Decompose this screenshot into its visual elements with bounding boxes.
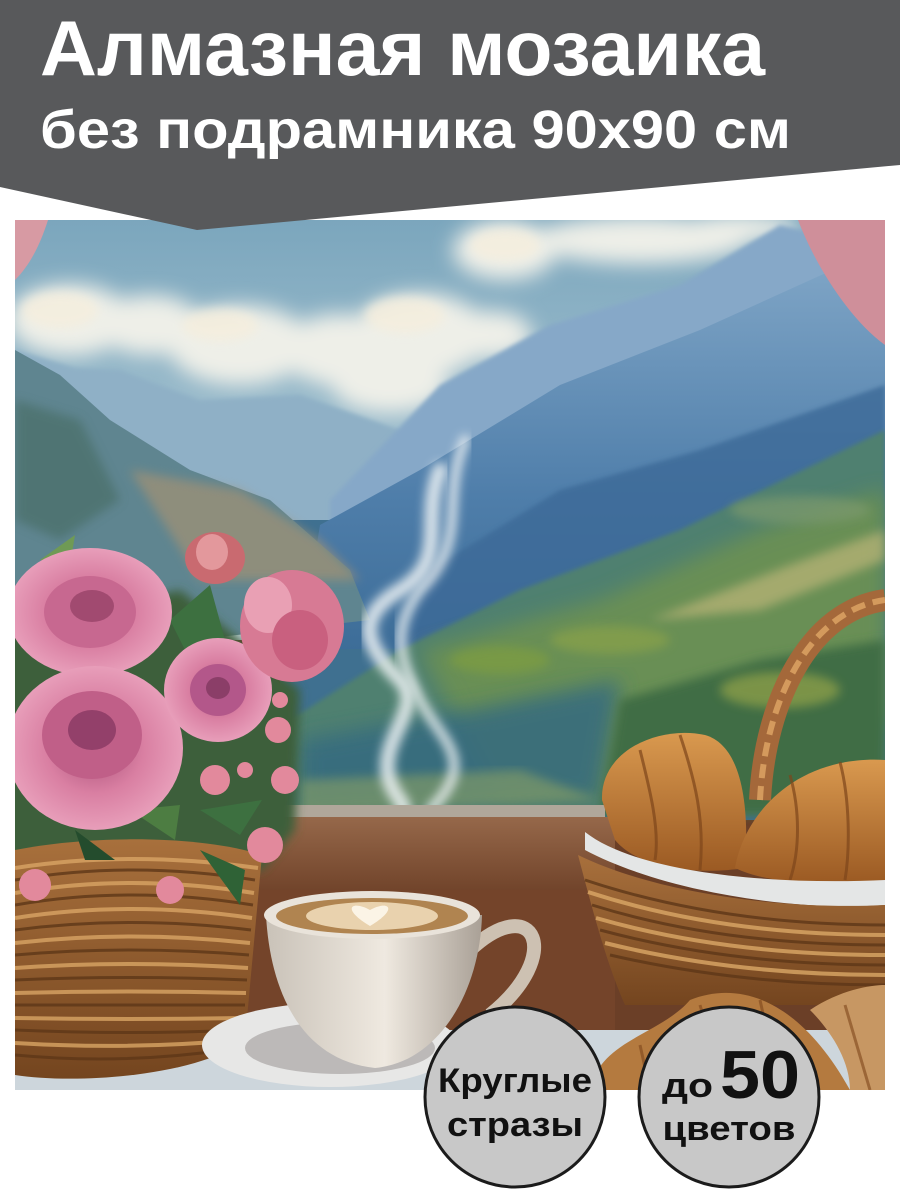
green valley — [290, 430, 885, 815]
curtains — [15, 220, 48, 280]
croissants — [602, 733, 885, 883]
left ridge — [15, 350, 370, 660]
window frame — [288, 805, 605, 817]
left wicker basket — [15, 839, 262, 1079]
badge: up to 50 colours: до — [662, 1067, 713, 1105]
badge: round rhinestones: Круглые — [438, 1062, 592, 1100]
right wicker basket — [578, 855, 885, 1005]
header banner — [0, 0, 900, 230]
roses — [7, 532, 344, 830]
badge: round rhinestones — [425, 1007, 605, 1187]
small pink flowers — [19, 692, 299, 904]
badge: up to 50 colours: 50 — [720, 1037, 800, 1113]
base colour under the scene — [233, 640, 884, 1030]
table — [15, 1030, 885, 1090]
main blue mountains — [280, 520, 885, 820]
foliage behind flowers — [0, 590, 300, 870]
front croissants — [590, 985, 885, 1090]
sky — [15, 220, 885, 640]
distant mountains — [18, 351, 396, 520]
leaves — [40, 535, 262, 905]
steam — [362, 430, 472, 805]
badge: round rhinestones: стразы — [447, 1106, 583, 1144]
valley forest patches — [450, 496, 870, 708]
croissant basket handle — [760, 600, 885, 800]
subheading: без подрамника 90х90 см — [40, 100, 791, 160]
coffee cup — [264, 891, 534, 1068]
badge: up to 50 colours: цветов — [662, 1110, 796, 1148]
saucer — [202, 1003, 458, 1087]
inner wall below the sill — [248, 897, 615, 1030]
badge: up to 50 colours — [639, 1007, 819, 1187]
heading: Алмазная мозаика — [40, 4, 766, 92]
clouds — [8, 214, 800, 413]
illustration: morning coffee by a mountain window — [0, 214, 885, 1090]
napkin — [585, 832, 885, 906]
